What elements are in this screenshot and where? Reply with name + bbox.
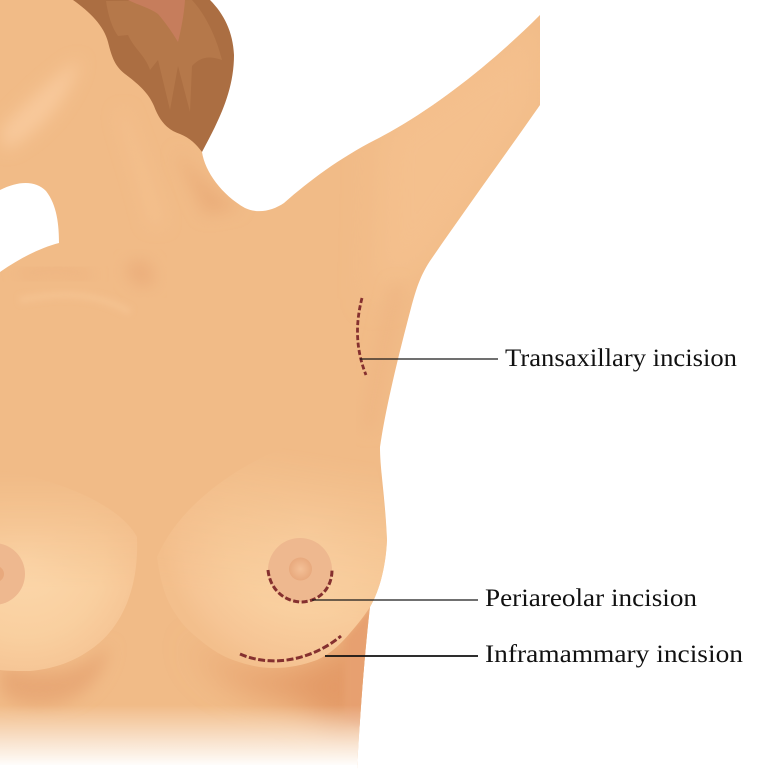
- shoulder and neck highlights: [1, 30, 540, 280]
- label: inframammary incision: Inframammary incision: [485, 641, 744, 668]
- label: periareolar incision: Periareolar incision: [485, 585, 698, 612]
- shadow under breasts: [0, 605, 375, 736]
- label: transaxillary incision: Transaxillary incision: [505, 345, 738, 372]
- leader line: transaxillary: [360, 358, 498, 360]
- breast: viewer's left: [0, 508, 137, 671]
- fade at bottom of torso: [0, 708, 360, 766]
- transaxillary incision: [357, 298, 366, 375]
- breast: viewer's right: [176, 492, 387, 668]
- periareolar incision: [268, 570, 332, 602]
- areola: [268, 538, 332, 602]
- leader line: periareolar: [312, 599, 478, 601]
- nipple: [289, 558, 312, 580]
- leader line: inframammary: [325, 655, 478, 657]
- areola: [0, 543, 25, 605]
- hair: [73, 0, 234, 152]
- torso, neck and raised arm: [0, 0, 560, 769]
- inframammary incision: [240, 636, 341, 661]
